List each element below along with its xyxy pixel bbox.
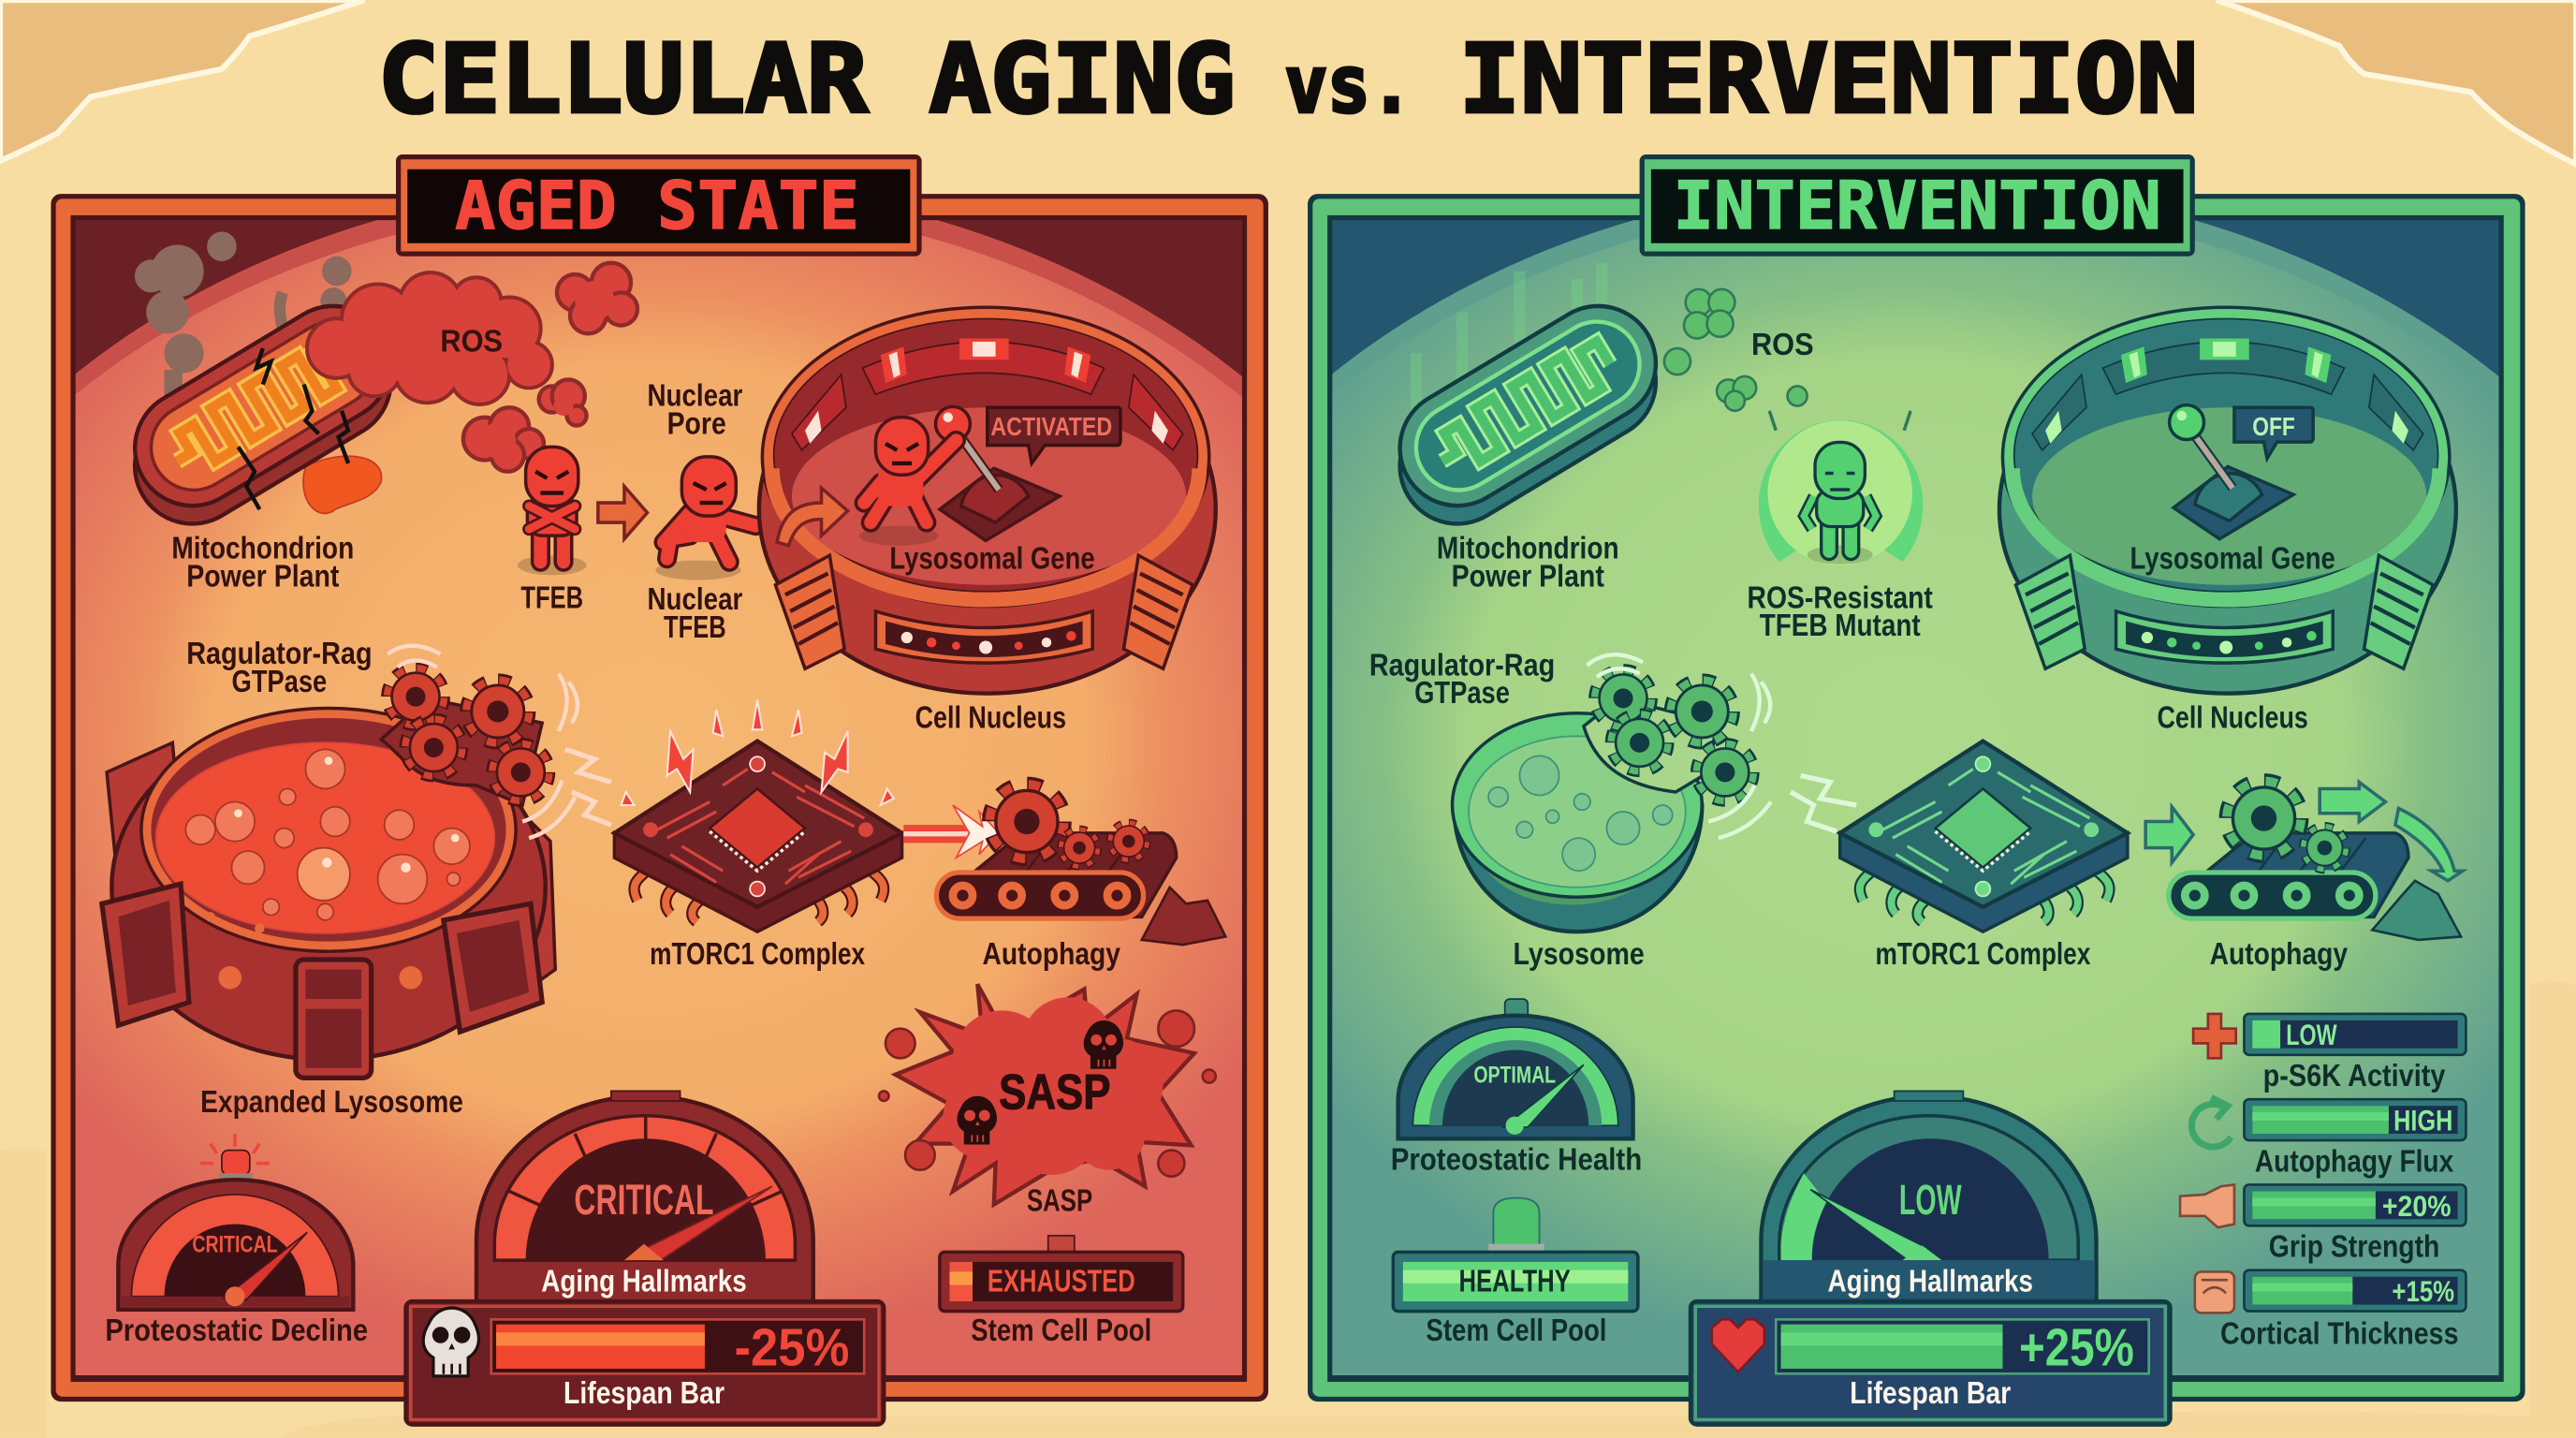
title: CELLULAR AGING	[378, 24, 1236, 135]
bar: low	[2244, 1014, 2466, 1055]
panel frame	[51, 194, 1268, 1402]
panel: aged state	[51, 154, 1268, 1427]
panel: lifespan bar: Lifespan Bar	[1850, 1376, 2011, 1411]
header: intervention	[1640, 154, 2195, 257]
label: mTORC1: mTORC1 Complex	[1875, 937, 2091, 972]
label: ragulator-rag: Ragulator-Rag	[186, 637, 373, 671]
icon: skull	[423, 1308, 478, 1376]
label: mitochondrion: Mitochondrion	[171, 532, 354, 566]
label: ROS-resistant TFEB mutant: TFEB Mutant	[1760, 609, 1921, 643]
icon: nuclear TFEB figure	[655, 457, 755, 580]
metric: p-S6K activity: p-S6K Activity	[2263, 1059, 2446, 1093]
label: ROS: ROS	[1751, 328, 1814, 362]
gauge: proteostatic health	[1398, 999, 1633, 1138]
bar: low: LOW	[2286, 1018, 2337, 1051]
icon: TFEB figure	[518, 447, 587, 575]
label: stem cell pool: Stem Cell Pool	[971, 1313, 1151, 1348]
bar: +15%: +15%	[2392, 1274, 2454, 1308]
status: stem cell pool healthy: HEALTHY	[1459, 1265, 1571, 1299]
label: nuclear TFEB: TFEB	[664, 610, 726, 645]
gauge: aging hallmarks: Aging Hallmarks	[1828, 1265, 2033, 1299]
label: SASP: SASP	[1027, 1184, 1092, 1219]
label: autophagy: Autophagy	[983, 937, 1120, 972]
gauge: aging hallmarks: LOW	[1899, 1176, 1962, 1224]
label: TFEB: TFEB	[520, 580, 583, 615]
icon: lysosomal gene lever	[936, 406, 1060, 540]
icon: ROS cloud	[307, 263, 637, 472]
metric: grip strength: Grip Strength	[2269, 1230, 2439, 1265]
callout: off	[2234, 407, 2313, 459]
label: nuclear pore: Nuclear	[648, 379, 742, 414]
icon: expanded lysosome	[102, 698, 555, 1078]
icon: gears	[1587, 654, 1771, 838]
icon: SASP explosion	[879, 984, 1216, 1204]
bar: lifespan +25%: +25%	[2019, 1317, 2134, 1376]
label: nuclear pore	[648, 379, 742, 441]
icon: green signal squiggle	[1791, 775, 1856, 831]
icon: cell nucleus	[1999, 307, 2456, 694]
icon: red signal squiggle	[565, 749, 611, 825]
title: INTERVENTION	[1459, 24, 2198, 135]
label: mitochondrion: Power Plant	[1452, 560, 1604, 594]
label: ragulator-rag	[1369, 648, 1555, 711]
icon: hand	[2180, 1184, 2234, 1227]
sand corner: top left	[0, 0, 365, 161]
label: lysosomal gene: Lysosomal Gene	[889, 541, 1095, 576]
gauge: aging hallmarks	[1761, 1091, 2097, 1306]
label: mitochondrion	[1437, 532, 1619, 594]
metric: cortical thickness	[2195, 1270, 2466, 1352]
bar: high: HIGH	[2393, 1104, 2452, 1137]
label: expanded lysosome: Expanded Lysosome	[200, 1085, 463, 1120]
label: mTORC1: mTORC1 Complex	[650, 937, 865, 972]
bar: lifespan +25%	[1776, 1317, 2149, 1376]
title	[378, 24, 2198, 135]
icon: mTORC1 chip	[1840, 741, 2128, 932]
label: cell nucleus: Cell Nucleus	[915, 701, 1066, 736]
icon: gears	[388, 646, 578, 838]
sand corner: top right	[2217, 0, 2576, 165]
icon: ROS cloud: ROS	[440, 325, 503, 360]
panel: lifespan bar	[406, 1301, 884, 1425]
icon: small ROS puffs	[1664, 289, 1808, 411]
icon: lysosomal gene lever off	[2170, 405, 2293, 539]
label: ragulator-rag	[186, 637, 373, 699]
icon: red cross	[2193, 1014, 2236, 1058]
bar: +20%	[2244, 1184, 2466, 1225]
status: stem cell pool exhausted: EXHAUSTED	[988, 1265, 1135, 1299]
label: autophagy: Autophagy	[2210, 937, 2348, 972]
icon: mTORC1 chip	[614, 741, 902, 932]
gauge: aging hallmarks: Aging Hallmarks	[541, 1265, 747, 1299]
label: proteostatic health: Proteostatic Health	[1391, 1143, 1642, 1178]
label: stem cell pool: Stem Cell Pool	[1426, 1313, 1606, 1348]
callout: activated	[988, 407, 1120, 463]
arrow: flow right	[2320, 782, 2385, 822]
arrow: curved down	[2395, 809, 2463, 881]
status: stem cell pool exhausted	[940, 1236, 1183, 1312]
title: vs.	[1284, 38, 1412, 130]
gauge: aging hallmarks: CRITICAL	[574, 1176, 714, 1224]
metric: autophagy flux	[2191, 1097, 2466, 1179]
label: ROS-resistant TFEB mutant: ROS-Resistant	[1748, 580, 1933, 615]
header: intervention: INTERVENTION	[1674, 168, 2161, 244]
icon: activating figure	[859, 418, 956, 546]
status: stem cell pool healthy	[1393, 1197, 1638, 1312]
icon: ROS-resistant TFEB mutant in shield	[1759, 411, 1923, 565]
icon: SASP explosion: SASP	[999, 1065, 1110, 1121]
label: nuclear pore: Pore	[667, 406, 726, 441]
header: aged state	[396, 154, 922, 257]
metric: p-S6K activity	[2193, 1014, 2466, 1093]
bar: +20%: +20%	[2382, 1189, 2452, 1223]
panel: intervention	[1308, 154, 2525, 1427]
callout: activated: ACTIVATED	[990, 412, 1112, 441]
metric: autophagy flux: Autophagy Flux	[2255, 1144, 2454, 1179]
bar: high	[2244, 1099, 2466, 1140]
metric: cortical thickness: Cortical Thickness	[2220, 1317, 2459, 1352]
callout: off: OFF	[2252, 412, 2295, 441]
panel: lifespan bar: Lifespan Bar	[564, 1376, 724, 1411]
icon: lysosome	[1453, 698, 1717, 932]
icon: cycle arrow	[2191, 1097, 2231, 1147]
icon: damaged mitochondrion	[113, 231, 412, 545]
icon: heart	[1712, 1319, 1764, 1372]
panel: lifespan bar	[1690, 1301, 2170, 1425]
bar: lifespan -25%: -25%	[735, 1317, 849, 1376]
icon: cell nucleus	[759, 307, 1216, 694]
label: mitochondrion: Mitochondrion	[1437, 532, 1619, 566]
arrow: TFEB to nuclear TFEB	[598, 487, 648, 539]
label: nuclear TFEB	[648, 582, 742, 645]
gauge: aging hallmarks	[476, 1091, 813, 1306]
panel frame	[1308, 194, 2525, 1402]
icon: healthy mitochondrion	[1379, 263, 1677, 545]
label: ragulator-rag: GTPase	[231, 665, 327, 699]
arrow: entering nucleus	[777, 488, 848, 546]
label: ROS-resistant TFEB mutant	[1748, 580, 1933, 643]
label: lysosomal gene: Lysosomal Gene	[2130, 541, 2335, 576]
label: ragulator-rag: GTPase	[1414, 676, 1510, 711]
metric: grip strength	[2180, 1184, 2466, 1265]
icon: brain card	[2195, 1271, 2234, 1313]
icon: autophagy conveyor	[2169, 785, 2461, 940]
arrow: inhibit beam	[903, 805, 999, 858]
label: mitochondrion: Power Plant	[186, 560, 339, 594]
gauge: proteostatic health: OPTIMAL	[1473, 1064, 1556, 1089]
label: mitochondrion	[171, 532, 354, 594]
header: aged state: AGED STATE	[455, 168, 859, 244]
bar: lifespan -25%	[491, 1317, 864, 1376]
label: lysosome: Lysosome	[1513, 937, 1645, 972]
label: ragulator-rag: Ragulator-Rag	[1369, 648, 1555, 682]
label: proteostatic decline: Proteostatic Decline	[105, 1313, 368, 1348]
label: nuclear TFEB: Nuclear	[648, 582, 742, 617]
icon: autophagy conveyor	[936, 787, 1225, 945]
icon: chip sparks	[621, 700, 894, 805]
arrow: chip to conveyor	[2145, 807, 2193, 862]
bar: +15%	[2244, 1270, 2466, 1312]
gauge: proteostatic decline: CRITICAL	[192, 1232, 278, 1257]
label: cell nucleus: Cell Nucleus	[2157, 701, 2308, 736]
gauge: proteostatic decline	[118, 1134, 353, 1310]
